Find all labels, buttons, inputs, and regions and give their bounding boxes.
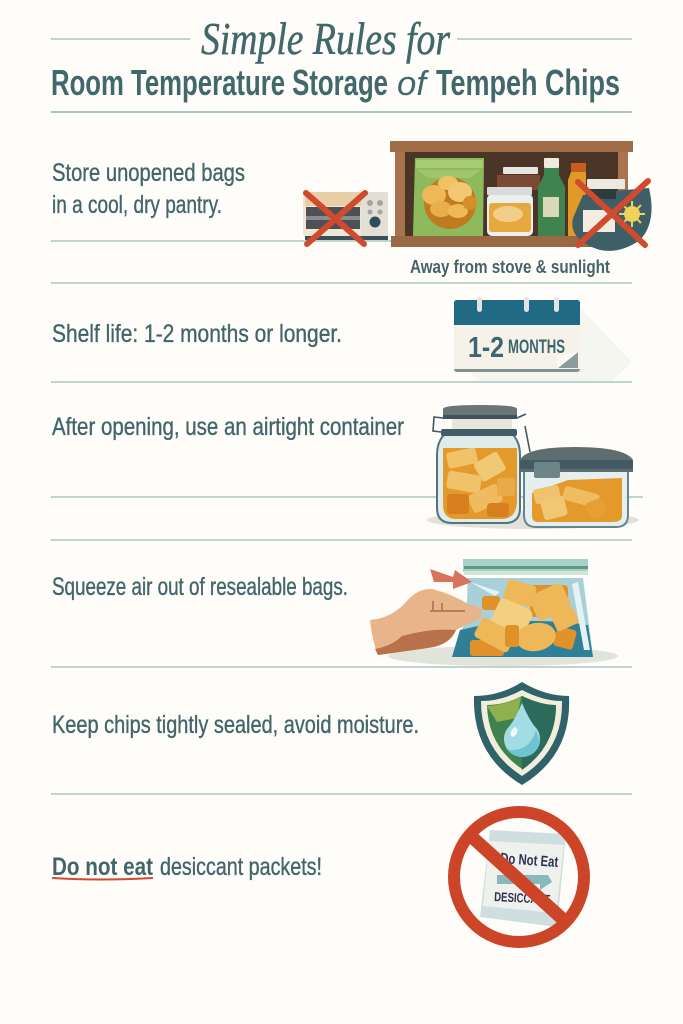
rule 1 text (52, 159, 245, 219)
rule 4 text: Squeeze air out of resealable bags. (52, 573, 348, 601)
rule 5 text: Keep chips tightly sealed, avoid moisture. (52, 711, 419, 739)
icon: shield with water drop (474, 682, 569, 785)
short container (520, 447, 633, 527)
calendar label (468, 332, 565, 364)
rule 2 text: Shelf life: 1-2 months or longer. (52, 320, 342, 348)
title bold line: Tempeh Chips (436, 62, 620, 103)
orange bottle (568, 163, 586, 236)
rule 3 text: After opening, use an airtight container (52, 413, 404, 441)
icon: hand squeezing resealable bag (370, 559, 618, 666)
front jar (487, 187, 533, 236)
red underline (52, 878, 153, 880)
icon: airtight containers (427, 405, 639, 529)
icon: do not eat desiccant packet (454, 812, 584, 942)
icon: microwave crossed out (303, 192, 388, 244)
tall jar (433, 405, 530, 523)
green chip bag (413, 158, 484, 236)
title bold line: of (397, 65, 430, 103)
back jar (497, 167, 540, 190)
water drop (504, 703, 540, 757)
icon: pantry shelf (390, 141, 633, 247)
green bottle (538, 158, 565, 236)
title (51, 13, 620, 103)
icon: calendar (454, 297, 632, 381)
title script line: Simple Rules for (201, 13, 451, 64)
rule 1 text: Store unopened bags (52, 159, 245, 187)
packet (480, 830, 566, 927)
rule 6 text: desiccant packets! (160, 853, 322, 881)
hand (370, 589, 482, 655)
rule 6 text (52, 853, 322, 881)
arrow (430, 569, 472, 589)
calendar label: 1-2 (468, 332, 504, 364)
bag (452, 559, 593, 657)
title bold line: Room Temperature Storage (51, 62, 388, 103)
packet: DESICCANT (494, 889, 551, 907)
rule 6 text: Do not eat (52, 853, 154, 881)
caption: away from stove and sunlight: Away from stove & sunlight (410, 257, 610, 277)
packet: Do Not Eat (500, 850, 559, 871)
icon: sunlight crossed out (572, 179, 652, 251)
calendar label: MONTHS (508, 337, 565, 358)
rule 1 text: in a cool, dry pantry. (52, 191, 222, 219)
chips in bag (470, 579, 580, 656)
